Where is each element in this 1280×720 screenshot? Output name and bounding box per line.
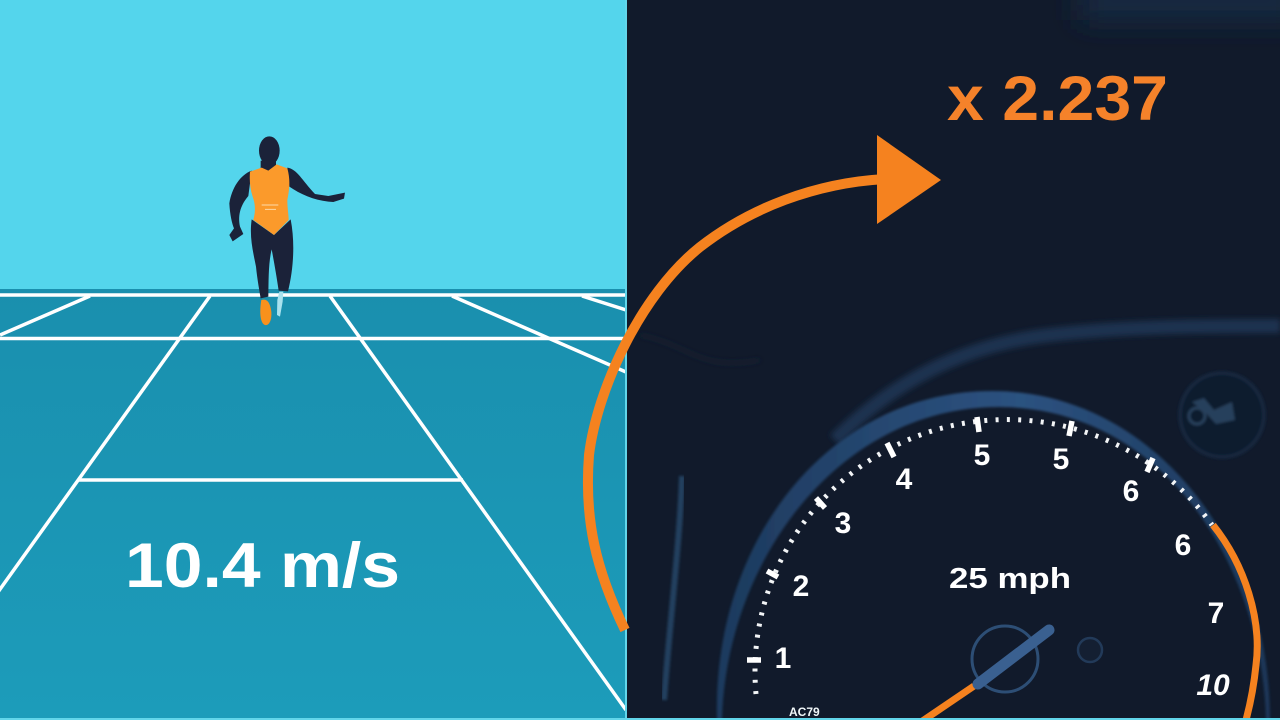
gauge numbers: 3 — [835, 507, 851, 540]
gauge numbers: 2 — [793, 570, 809, 603]
small bottom gauge text: AC79 — [789, 705, 820, 719]
gauge outer ring — [717, 391, 1270, 720]
gauge numbers: 1 — [775, 642, 791, 675]
dark background — [627, 0, 1280, 720]
speed readout: 25 mph — [949, 563, 1071, 595]
top glow — [1080, 0, 1280, 20]
multiplier label: x 2.237 — [947, 64, 1168, 134]
panel: speedometer dashboard — [627, 0, 1280, 720]
gauge numbers: 6 — [1123, 475, 1139, 508]
curved conversion arrow — [588, 135, 941, 630]
panel: sprinter on track — [0, 0, 626, 720]
gauge numbers — [775, 439, 1230, 702]
gauge numbers: 4 — [896, 463, 913, 496]
gauge needle and hub — [918, 626, 1102, 720]
gauge numbers: 5 — [974, 439, 990, 472]
gauge numbers: 10 — [1196, 669, 1230, 702]
gauge numbers: 6 — [1175, 529, 1191, 562]
gauge numbers: 5 — [1053, 443, 1069, 476]
dashboard hood contours — [830, 317, 1280, 444]
gauge major ticks — [747, 417, 1153, 660]
warning lamp icon — [1180, 373, 1264, 457]
left dashboard strip — [664, 476, 682, 700]
redline arc — [1213, 525, 1257, 720]
speed label: 10.4 m/s — [125, 531, 400, 601]
running track — [0, 289, 626, 720]
sprinter figure — [229, 136, 345, 325]
gauge numbers: 7 — [1208, 597, 1224, 630]
gauge minor ticks — [755, 420, 1212, 694]
sky background — [0, 0, 626, 291]
